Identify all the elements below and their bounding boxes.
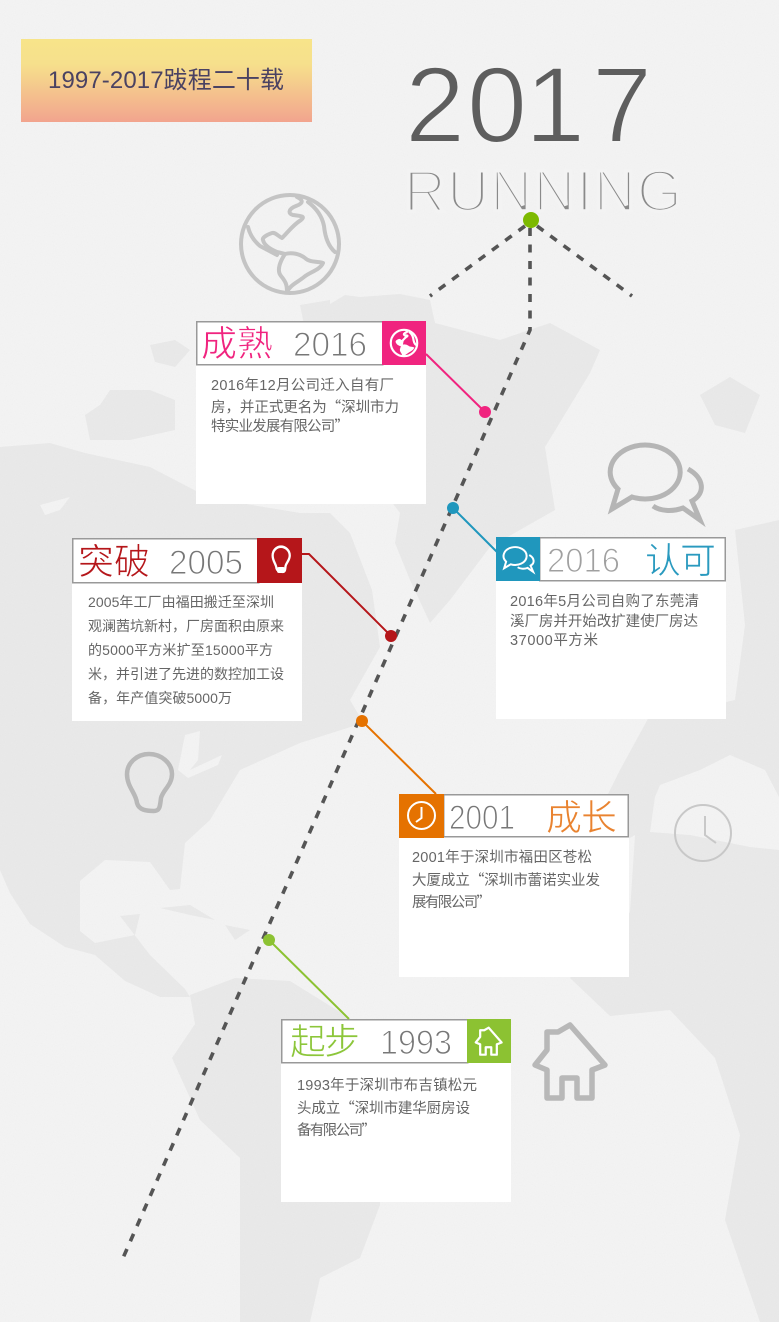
year: 2016 <box>293 326 367 364</box>
panel: 成熟 2016 <box>196 321 426 504</box>
description: 头成立“深圳市建华厨房设 <box>297 1097 470 1118</box>
icon: red bulb <box>257 538 302 583</box>
description: 备有限公司” <box>297 1119 376 1140</box>
icon: chat bubbles <box>610 445 701 520</box>
title box <box>21 39 312 122</box>
RUNNING subtitle: RUNNING <box>404 159 682 224</box>
connector and dot: orange <box>356 715 436 794</box>
timeline top dot <box>523 212 539 228</box>
heading: 成长 <box>546 797 617 838</box>
panel: 2016 认可 <box>496 537 726 719</box>
description: 展有限公司” <box>412 891 491 912</box>
icon: blue chat <box>496 537 540 581</box>
description: 观澜茜坑新村，厂房面积由原来 <box>88 618 284 634</box>
description: 2016年12月公司迁入自有厂 <box>211 377 394 394</box>
description: 溪厂房并开始改扩建使厂房达 <box>510 613 698 630</box>
heading: 起步 <box>290 1021 360 1062</box>
icon: orange clock <box>399 794 444 838</box>
description <box>88 594 284 706</box>
year: 1993 <box>380 1024 452 1062</box>
description <box>510 593 699 649</box>
panel: 起步 1993 <box>281 1019 511 1202</box>
description: 2016年5月公司自购了东莞清 <box>510 593 699 610</box>
icon: globe <box>241 195 339 293</box>
description <box>211 377 399 436</box>
year: 2001 <box>449 799 515 837</box>
description: 大厦成立“深圳市蕾诺实业发 <box>412 869 600 890</box>
icon: house <box>535 1025 605 1098</box>
description: 备，年产值突破5000万 <box>88 690 232 706</box>
icon: light bulb <box>127 754 172 811</box>
year heading 2017: 2017 <box>405 44 652 165</box>
panel: 突破 2005 <box>72 538 302 721</box>
connector and dot: pink <box>426 354 491 418</box>
connector and dot: red <box>302 554 397 642</box>
heading: 认可 <box>645 540 716 581</box>
timeline dashed line <box>123 226 632 1258</box>
icon: pink globe <box>382 321 426 365</box>
year: 2016 <box>547 542 620 580</box>
heading: 突破 <box>78 541 150 582</box>
description: 1993年于深圳市布吉镇松元 <box>297 1077 477 1094</box>
description: 特实业发展有限公司” <box>211 415 349 436</box>
description <box>297 1077 477 1140</box>
title box: 1997-2017跋程二十载 <box>48 67 284 94</box>
description: 2001年于深圳市福田区苍松 <box>412 849 592 866</box>
heading: 成熟 <box>201 323 273 364</box>
connector and dot: blue <box>447 502 497 552</box>
description: 的5000平方米扩至15000平方 <box>88 642 273 658</box>
background world map <box>0 294 779 1322</box>
description: 2005年工厂由福田搬迁至深圳 <box>88 594 274 610</box>
panel: 2001 成长 <box>399 794 629 977</box>
description: 37000平方米 <box>510 632 598 649</box>
icon: green house <box>467 1019 511 1063</box>
description <box>412 849 600 912</box>
connector and dot: green <box>263 934 349 1019</box>
description: 米，并引进了先进的数控加工设 <box>88 666 284 682</box>
year: 2005 <box>169 544 243 582</box>
description: 房，并正式更名为“深圳市力 <box>211 396 399 417</box>
icon: clock <box>675 805 731 861</box>
